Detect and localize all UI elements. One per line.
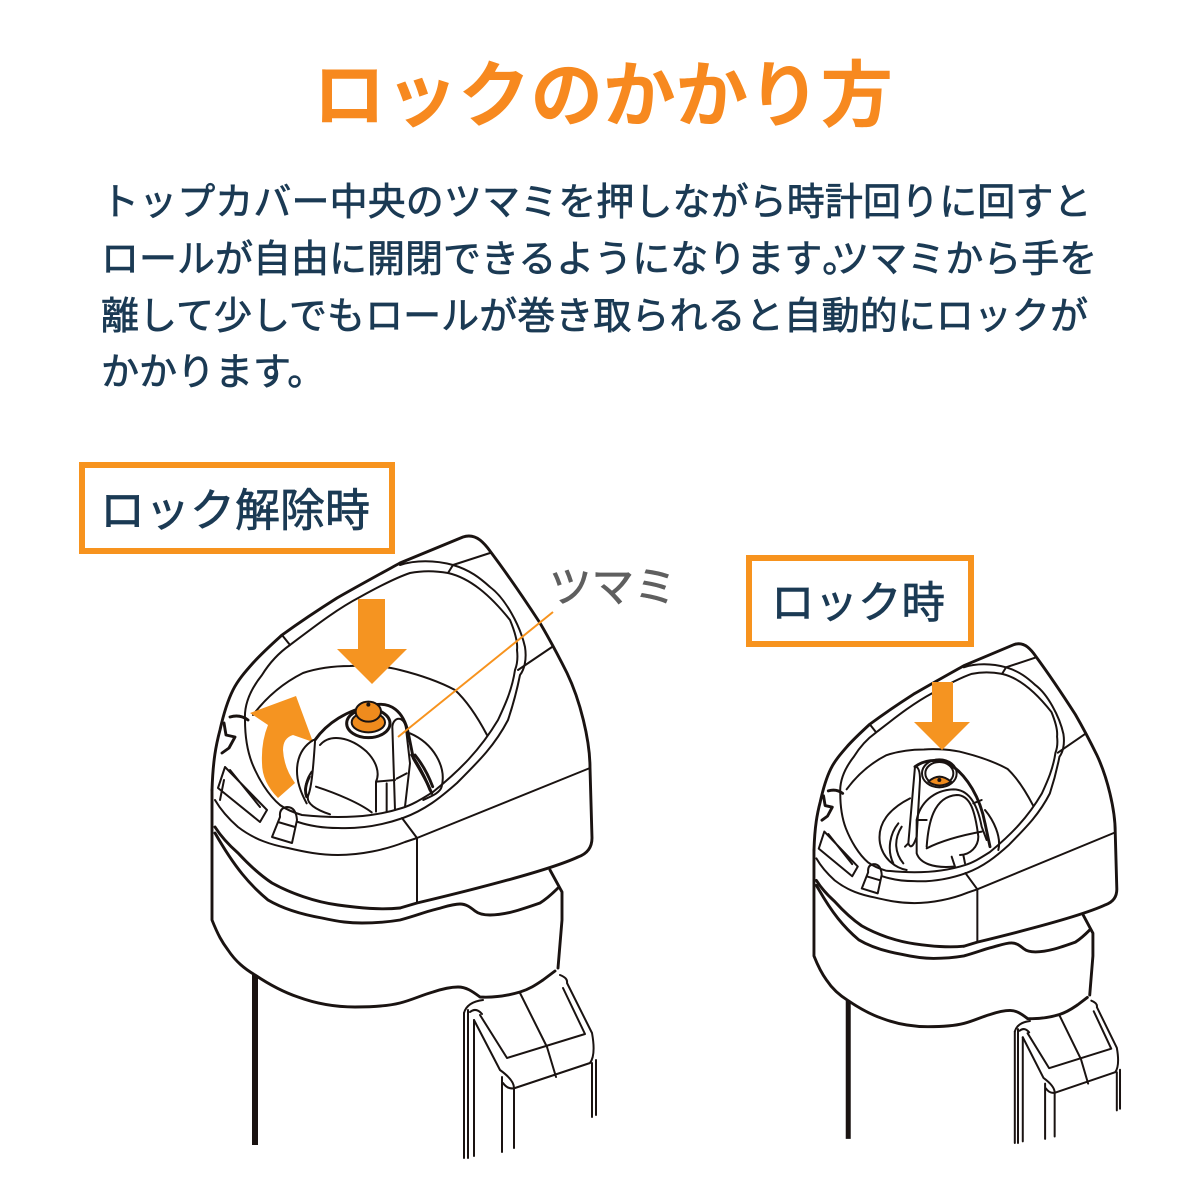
description text: 離して少しでもロールが巻き取られると自動的にロックが <box>101 296 1088 338</box>
label: unlocked state <box>79 462 395 554</box>
icon: down arrow unlocked <box>337 599 407 684</box>
label: locked state <box>746 555 974 647</box>
knob: locked <box>879 759 999 870</box>
title: ロックのかかり方 <box>313 56 893 137</box>
icon: down arrow locked <box>914 682 970 750</box>
label: unlocked state: ロック解除時 <box>100 485 370 536</box>
label: knob: ツマミ <box>549 565 677 612</box>
icon: curved rotation arrow <box>250 696 313 798</box>
label: locked state: ロック時 <box>771 580 945 628</box>
description text: ロールが自由に開閉できるようになります。ツマミから手を <box>101 239 1097 281</box>
description text <box>101 182 1097 394</box>
description text: かかります。 <box>101 352 325 394</box>
illustration: locked lid <box>814 644 1120 1143</box>
leader line <box>398 612 553 737</box>
illustration: unlocked lid <box>212 536 596 1158</box>
description text: トップカバー中央のツマミを押しながら時計回りに回すと <box>101 182 1092 224</box>
knob: unlocked <box>297 702 443 814</box>
